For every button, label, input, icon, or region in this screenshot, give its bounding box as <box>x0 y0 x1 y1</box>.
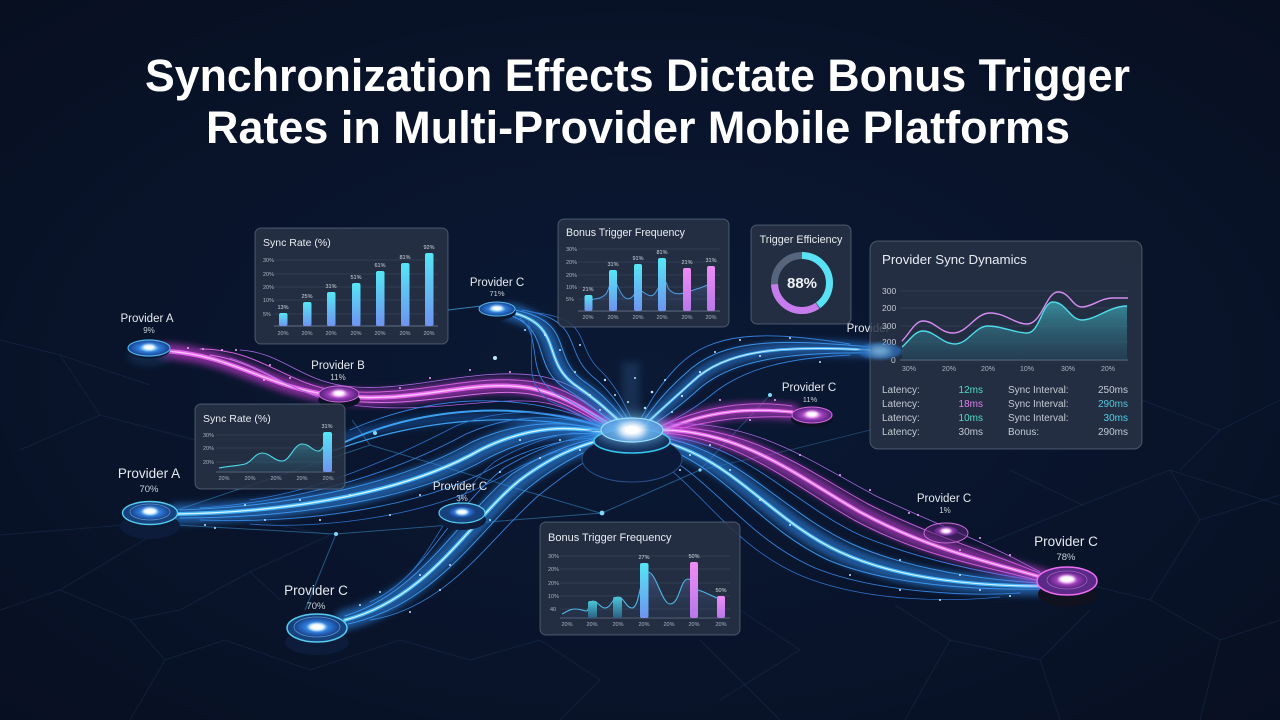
y axis labels: 20% <box>548 567 559 573</box>
grid lines <box>216 435 335 472</box>
data table: 10ms <box>959 413 983 424</box>
bar values: 13% <box>277 305 289 311</box>
label: provider C lower right: Provider C <box>917 493 971 505</box>
y axis labels: 30% <box>548 554 559 560</box>
data table: Latency: <box>882 427 920 438</box>
data table: Sync Interval: <box>1008 385 1069 396</box>
bar values <box>277 245 435 311</box>
x axis labels: 20% <box>607 315 619 321</box>
data table: Latency: <box>882 413 920 424</box>
x axis labels: 20% <box>301 331 313 337</box>
highlighted bar <box>323 432 332 472</box>
x axis labels <box>277 331 435 337</box>
label: provider B: 11% <box>330 373 346 382</box>
data table: 12ms <box>959 385 983 396</box>
label: provider C right: 11% <box>803 395 818 404</box>
y axis labels <box>548 554 559 613</box>
x axis labels: 20% <box>1101 366 1115 373</box>
bar values: 27% <box>638 555 650 561</box>
x axis labels <box>582 315 717 321</box>
panel: trigger efficiency <box>751 225 851 324</box>
node: provider C far right <box>1037 567 1097 607</box>
x axis labels: 20% <box>681 315 693 321</box>
y axis labels: 300 <box>882 321 896 331</box>
area and line <box>562 572 717 618</box>
label: provider C bottom-left: 70% <box>306 601 326 612</box>
x axis labels: 20% <box>942 366 956 373</box>
area and trend line <box>585 278 715 311</box>
x axis labels: 20% <box>981 366 995 373</box>
bar values: 50% <box>715 588 727 594</box>
particles <box>204 329 1011 613</box>
x axis labels: 20% <box>325 331 337 337</box>
x axis labels: 20% <box>399 331 411 337</box>
y axis labels <box>263 258 274 318</box>
panel: provider sync dynamics <box>870 241 1142 449</box>
x axis labels: 20% <box>244 476 256 482</box>
x axis labels: 20% <box>296 476 308 482</box>
node: provider A top <box>127 340 171 366</box>
y axis labels: 0 <box>891 355 896 365</box>
stream: left provider A to hub (blue) <box>176 413 618 525</box>
y axis labels: 40 <box>550 607 556 613</box>
bar values: 50% <box>688 554 700 560</box>
x axis labels: 20% <box>423 331 435 337</box>
x axis labels: 20% <box>663 622 675 628</box>
bar values: 61% <box>374 263 386 269</box>
grid lines <box>274 260 438 326</box>
node: provider B <box>318 386 360 408</box>
stream: top provider C to hub (blue) <box>510 310 634 432</box>
y axis labels: 300 <box>882 286 896 296</box>
y axis labels: 30% <box>263 258 274 264</box>
stream: hub upper-left blue band <box>330 401 612 452</box>
light beam above hub <box>622 362 640 425</box>
label: provider A top: 9% <box>143 326 155 335</box>
stream: provider A to provider B to hub (magenta) <box>165 349 620 432</box>
bar values: 91% <box>632 256 644 262</box>
label: provider C middle: 3% <box>456 494 468 503</box>
donut chart <box>774 256 830 310</box>
y axis labels: 20% <box>263 285 274 291</box>
label: provider C far right <box>1034 534 1098 563</box>
y axis labels: 10% <box>566 285 577 291</box>
node: provider C middle <box>438 503 486 530</box>
label: provider C far right: 78% <box>1056 552 1076 563</box>
panel: bonus trigger frequency top <box>558 219 729 327</box>
y axis labels: 20% <box>263 272 274 278</box>
grid lines <box>578 249 720 311</box>
bars <box>584 258 715 311</box>
node: provider C right <box>791 407 833 427</box>
label: provider C right <box>782 382 836 404</box>
x axis labels: 30% <box>1061 366 1075 373</box>
x axis labels: 30% <box>902 366 916 373</box>
grid lines <box>560 556 730 618</box>
bar values: 21% <box>582 287 594 293</box>
x axis labels: 20% <box>374 331 386 337</box>
label: provider C right: Provider C <box>782 382 836 394</box>
y axis labels: 200 <box>882 337 896 347</box>
x axis labels: 20% <box>638 622 650 628</box>
area and line <box>219 443 325 472</box>
data table: 30ms <box>1104 413 1128 424</box>
heading: bonus trigger frequency bottom: Bonus Trigger Frequency <box>548 532 672 544</box>
x axis labels: 20% <box>270 476 282 482</box>
bar values: 51% <box>350 275 362 281</box>
label: provider C top: Provider C <box>470 277 524 289</box>
x axis labels: 20% <box>705 315 717 321</box>
y axis labels: 5% <box>566 297 574 303</box>
donut value: 88% <box>787 275 817 292</box>
data table: Bonus: <box>1008 427 1039 438</box>
heading: sync rate: Sync Rate (%) <box>263 237 331 249</box>
label: provider B <box>311 360 365 382</box>
y axis labels: 200 <box>882 303 896 313</box>
label: provider C top <box>470 277 524 298</box>
node: provider C bottom-left <box>285 614 349 655</box>
bar values: 31% <box>607 262 619 268</box>
label: provider C far right: Provider C <box>1034 534 1098 549</box>
x axis labels <box>561 622 727 628</box>
label: provider C bottom-left <box>284 583 348 612</box>
y axis labels: 20% <box>548 581 559 587</box>
y axis labels: 10% <box>548 594 559 600</box>
heading: sync rate small: Sync Rate (%) <box>203 413 271 425</box>
label: provider A left <box>118 466 180 495</box>
grid lines <box>900 291 1128 360</box>
label: provider A left: 70% <box>139 484 159 495</box>
bar values: 31% <box>705 258 717 264</box>
label: provider C lower right <box>917 493 971 515</box>
data table <box>882 385 1128 438</box>
bar values: 92% <box>423 245 435 251</box>
node: provider C lower right <box>924 523 968 543</box>
data table: Sync Interval: <box>1008 399 1069 410</box>
title: Rates in Multi-Provider Mobile Platforms <box>206 102 1070 153</box>
x axis labels: 20% <box>350 331 362 337</box>
stream: hub to bottom-right provider C (magenta) <box>664 424 1044 581</box>
panel: bonus trigger frequency bottom <box>540 522 740 635</box>
x axis labels: 20% <box>561 622 573 628</box>
label: provider C middle <box>433 481 487 503</box>
stream: right top provider to hub (blue) <box>638 336 870 430</box>
x axis labels: 20% <box>218 476 230 482</box>
y axis labels: 30% <box>566 247 577 253</box>
data table: Latency: <box>882 399 920 410</box>
x axis labels: 20% <box>582 315 594 321</box>
y axis labels: 10% <box>263 298 274 304</box>
bars <box>588 562 725 618</box>
stream: hub to bottom-right provider C (blue) <box>640 436 1040 600</box>
y axis labels: 30% <box>203 433 214 439</box>
bar values: 81% <box>399 255 411 261</box>
x axis labels <box>902 366 1115 373</box>
label: provider C bottom-left: Provider C <box>284 583 348 598</box>
label: provider A top: Provider A <box>120 313 174 325</box>
heading: bonus trigger frequency: Bonus Trigger Frequency <box>566 227 686 239</box>
x axis labels: 20% <box>656 315 668 321</box>
label: provider C top: 71% <box>489 289 505 298</box>
data table: Latency: <box>882 385 920 396</box>
x axis labels <box>218 476 334 482</box>
data table: 290ms <box>1098 399 1128 410</box>
label: provider C lower right: 1% <box>939 506 951 515</box>
node: provider far right top, glowing over panel edge <box>858 343 902 359</box>
y axis labels: 20% <box>566 273 577 279</box>
label: provider top right, clipped by panel: Provider <box>847 323 890 335</box>
area chart <box>902 292 1128 360</box>
x axis labels: 20% <box>322 476 334 482</box>
heading: provider sync dynamics: Provider Sync Dynamics <box>882 252 1027 267</box>
panel: sync rate small chart <box>195 404 345 489</box>
x axis labels: 20% <box>688 622 700 628</box>
y axis labels <box>566 247 577 303</box>
label: provider A left: Provider A <box>118 466 180 481</box>
bars <box>279 253 434 326</box>
bar values: 21% <box>681 260 693 266</box>
network connector lines <box>176 305 870 610</box>
bar values: 25% <box>301 294 313 300</box>
y axis labels: 20% <box>203 460 214 466</box>
stream: right provider C to hub (magenta) <box>662 404 792 433</box>
x axis labels: 20% <box>586 622 598 628</box>
x axis labels: 20% <box>632 315 644 321</box>
node: provider C top <box>478 302 516 320</box>
label: provider B: Provider B <box>311 360 365 372</box>
y axis labels <box>203 433 214 466</box>
y axis labels: 5% <box>263 312 271 318</box>
x axis labels: 20% <box>715 622 727 628</box>
y axis labels: 20% <box>203 446 214 452</box>
y axis labels <box>882 286 896 365</box>
central hub <box>582 415 682 482</box>
bar value: 31% <box>321 424 333 430</box>
y axis labels: 20% <box>566 260 577 266</box>
title: Synchronization Effects Dictate Bonus Trigger <box>145 50 1130 101</box>
x axis labels: 20% <box>612 622 624 628</box>
hexagonal network grid <box>0 340 1280 720</box>
x axis labels: 20% <box>277 331 289 337</box>
stream: bottom-left provider C to hub (blue) <box>345 430 622 624</box>
title <box>145 50 1130 153</box>
data table: Sync Interval: <box>1008 413 1069 424</box>
label: provider A top <box>120 313 174 335</box>
x axis labels: 10% <box>1020 366 1034 373</box>
bar values <box>582 250 717 293</box>
label: provider C middle: Provider C <box>433 481 487 493</box>
data table: 250ms <box>1098 385 1128 396</box>
data table: 30ms <box>959 427 983 438</box>
bar values <box>638 554 727 594</box>
heading: trigger efficiency: Trigger Efficiency <box>760 234 843 246</box>
bar values: 81% <box>656 250 668 256</box>
data table: 18ms <box>959 399 983 410</box>
bar values: 31% <box>325 284 337 290</box>
data table: 290ms <box>1098 427 1128 438</box>
node: provider A left <box>120 502 180 539</box>
panel: sync rate bars <box>255 228 448 344</box>
